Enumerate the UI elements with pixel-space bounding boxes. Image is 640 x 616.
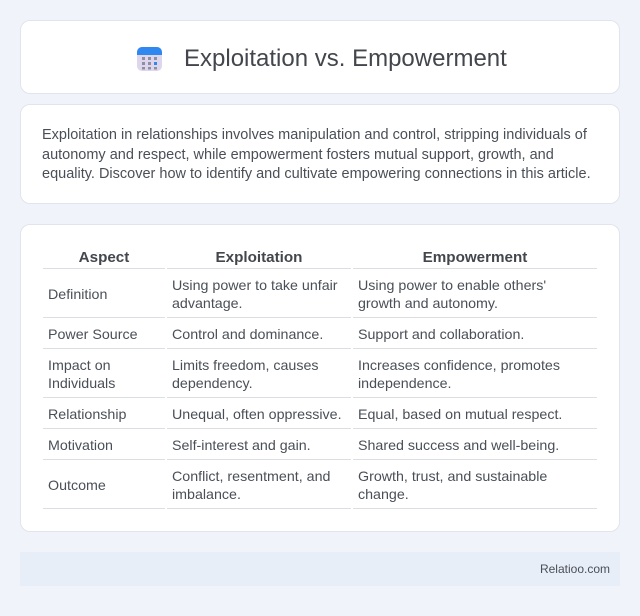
panel: title card	[20, 20, 620, 94]
row: outcome	[48, 469, 547, 503]
row: impact on individuals: Limits freedom, causes	[172, 358, 319, 374]
row: power source: Support and collaboration.	[358, 327, 524, 343]
table header: Empowerment	[423, 249, 527, 266]
row: definition: advantage.	[172, 296, 243, 312]
intro text: Exploitation in relationships involves manipulation and control, stripping individuals of	[42, 127, 587, 143]
row: motivation: Shared success and well-being.	[358, 438, 559, 454]
row: impact on individuals: Individuals	[48, 376, 115, 392]
row: motivation	[48, 438, 559, 454]
row: impact on individuals: Impact on	[48, 358, 111, 374]
intro text: autonomy and respect, while empowerment fosters mutual support, growth, and	[42, 146, 554, 162]
title: Exploitation vs. Empowerment	[184, 45, 507, 72]
row: definition: growth and autonomy.	[358, 296, 498, 312]
footer bar	[20, 552, 620, 586]
row: motivation: Motivation	[48, 438, 113, 454]
row: outcome: Conflict, resentment, and	[172, 469, 330, 485]
row: relationship: Relationship	[48, 407, 126, 423]
row: impact on individuals: Increases confidence, promotes	[358, 358, 560, 374]
row: definition: Definition	[48, 287, 107, 303]
row: outcome: change.	[358, 487, 409, 503]
table header: Exploitation	[216, 249, 302, 266]
row: impact on individuals	[48, 358, 560, 392]
table header: Aspect	[79, 249, 129, 266]
row: outcome: Growth, trust, and sustainable	[358, 469, 547, 485]
row: impact on individuals: dependency.	[172, 376, 253, 392]
footer text: Relatioo.com	[540, 562, 610, 576]
intro text	[42, 127, 591, 182]
row: relationship	[48, 407, 562, 423]
table header	[79, 249, 528, 266]
row: motivation: Self-interest and gain.	[172, 438, 311, 454]
panel: introduction	[20, 104, 620, 204]
row: definition: Using power to take unfair	[172, 278, 338, 294]
row: outcome: imbalance.	[172, 487, 241, 503]
row: outcome: Outcome	[48, 478, 106, 494]
intro text: equality. Discover how to identify and cultivate empowering connections in this article.	[42, 166, 591, 182]
row: power source: Power Source	[48, 327, 138, 343]
panel: comparison table	[20, 224, 620, 532]
icon: calendar	[137, 47, 162, 71]
row: relationship: Equal, based on mutual respect.	[358, 407, 562, 423]
row: definition: Using power to enable others'	[358, 278, 546, 294]
row: power source: Control and dominance.	[172, 327, 323, 343]
row: power source	[48, 327, 524, 343]
row: relationship: Unequal, often oppressive.	[172, 407, 342, 423]
row: definition	[48, 278, 546, 312]
row: impact on individuals: independence.	[358, 376, 452, 392]
